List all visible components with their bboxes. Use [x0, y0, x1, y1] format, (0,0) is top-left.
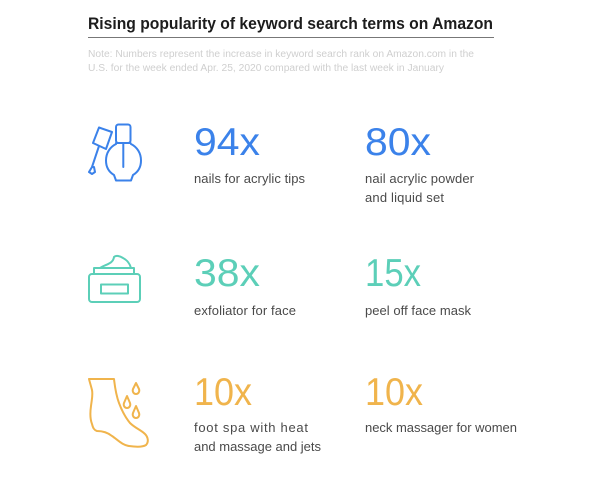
stat: 10x neck massager [365, 371, 517, 435]
note: U.S. for the week ended Apr. 25, 2020 compared with the last week in January [88, 63, 444, 74]
stat: 94x: nails for acrylic tips [194, 171, 306, 186]
stat: 15x: peel off face mask [365, 303, 472, 318]
stat: 80x: and liquid set [365, 190, 444, 205]
stat: 38x: 38x [194, 252, 261, 295]
stat: 10x foot spa: foot spa with heat [194, 420, 308, 435]
note [88, 49, 474, 74]
stat: 94x [194, 121, 306, 186]
stat: 10x foot spa [194, 371, 322, 454]
stat: 10x foot spa: 10x [194, 371, 252, 414]
stat: 10x neck massager: neck massager for women [365, 420, 517, 435]
stat: 10x neck massager: 10x [365, 371, 423, 414]
note: Note: Numbers represent the increase in keyword search rank on Amazon.com in the [88, 49, 474, 60]
stat: 80x: nail acrylic powder [365, 171, 475, 186]
stat: 38x [194, 252, 296, 318]
icon: nail polish [89, 124, 141, 180]
stat: 15x: 15x [365, 252, 421, 295]
stat: 15x [365, 252, 472, 318]
stat: 80x: 80x [365, 121, 432, 164]
stat: 10x foot spa: and massage and jets [194, 439, 322, 454]
icon: cream jar [89, 256, 140, 302]
title: Rising popularity of keyword search terms on Amazon [88, 15, 493, 33]
stat: 94x: 94x [194, 121, 261, 164]
stat: 80x [365, 121, 475, 205]
icon: foot with drops [89, 379, 148, 447]
stat: 38x: exfoliator for face [194, 303, 296, 318]
